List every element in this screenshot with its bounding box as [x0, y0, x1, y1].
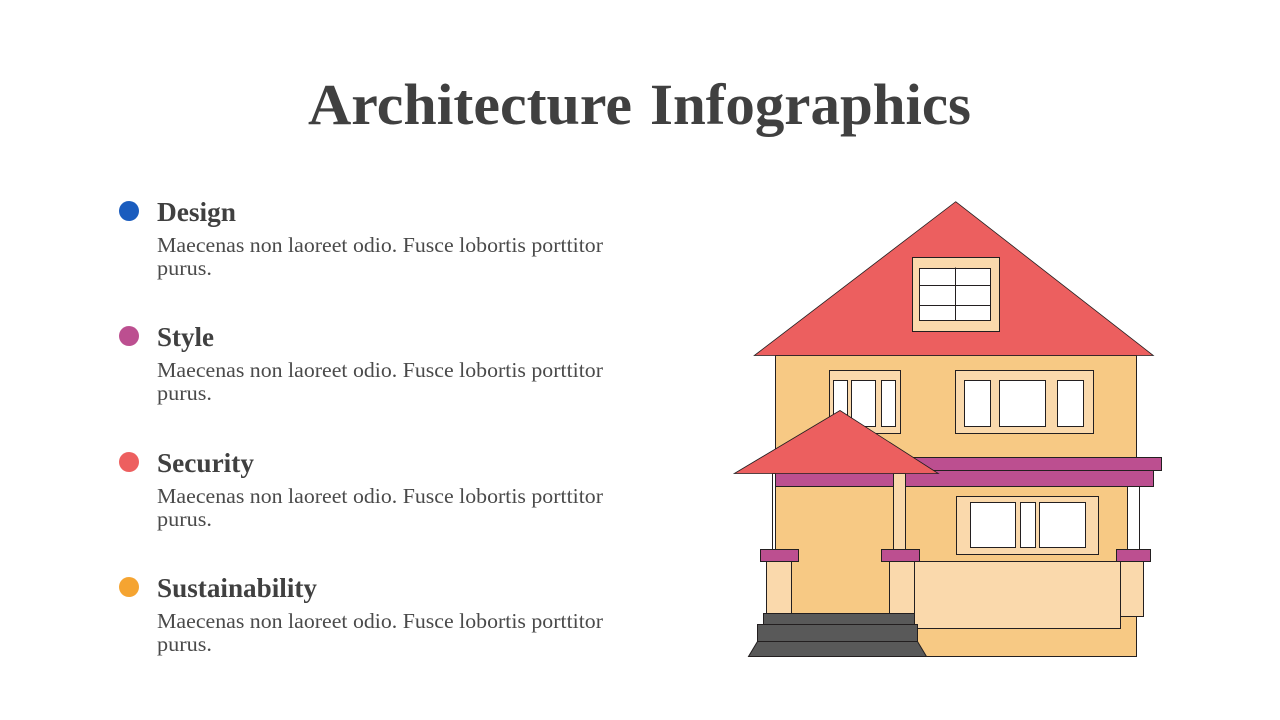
right pier base	[1120, 562, 1144, 616]
item: style	[119, 322, 603, 405]
pier caps	[760, 550, 1150, 562]
text: sustainability description: Maecenas non laoreet odio. Fusce lobortis porttitor	[157, 609, 603, 633]
lower purple band	[776, 470, 1154, 486]
text: design description	[157, 233, 603, 280]
title	[308, 72, 971, 137]
lower window	[956, 496, 1098, 554]
text: style description: purus.	[157, 381, 212, 405]
main roof	[754, 202, 1153, 356]
bullet: design	[119, 201, 139, 221]
bullet: security	[119, 452, 139, 472]
text: sustainability description	[157, 609, 603, 656]
item: sustainability	[119, 573, 603, 656]
text: sustainability description: purus.	[157, 632, 212, 656]
text: design description: purus.	[157, 256, 212, 280]
text: security description: Maecenas non laoreet odio. Fusce lobortis porttitor	[157, 484, 603, 508]
left pier base	[766, 562, 792, 614]
balcony wall	[914, 562, 1120, 628]
upper purple band	[906, 458, 1162, 470]
porch roof	[734, 410, 938, 474]
heading: sustainability: Sustainability	[157, 573, 318, 603]
text: style description: Maecenas non laoreet odio. Fusce lobortis porttitor	[157, 358, 603, 382]
white porch posts	[772, 474, 1140, 550]
text: security description	[157, 484, 603, 531]
porch column	[894, 474, 906, 550]
list: architecture topics	[119, 197, 603, 656]
bullet: sustainability	[119, 577, 139, 597]
heading: security: Security	[157, 448, 254, 478]
bullet: style	[119, 326, 139, 346]
entrance steps	[748, 614, 926, 656]
item: security	[119, 448, 603, 531]
centre pier base	[890, 562, 914, 614]
dormer window	[912, 258, 1000, 332]
text: design description: Maecenas non laoreet odio. Fusce lobortis porttitor	[157, 233, 603, 257]
illustration: house	[734, 202, 1162, 656]
item: design	[119, 197, 603, 280]
house wall	[776, 356, 1136, 656]
heading: design: Design	[157, 197, 236, 227]
heading: style: Style	[157, 322, 214, 352]
upper right window	[956, 370, 1094, 434]
text: style description	[157, 358, 603, 405]
title: Architecture	[308, 72, 632, 137]
upper left window	[830, 370, 900, 434]
text: security description: purus.	[157, 507, 212, 531]
title: Infographics	[650, 72, 971, 137]
